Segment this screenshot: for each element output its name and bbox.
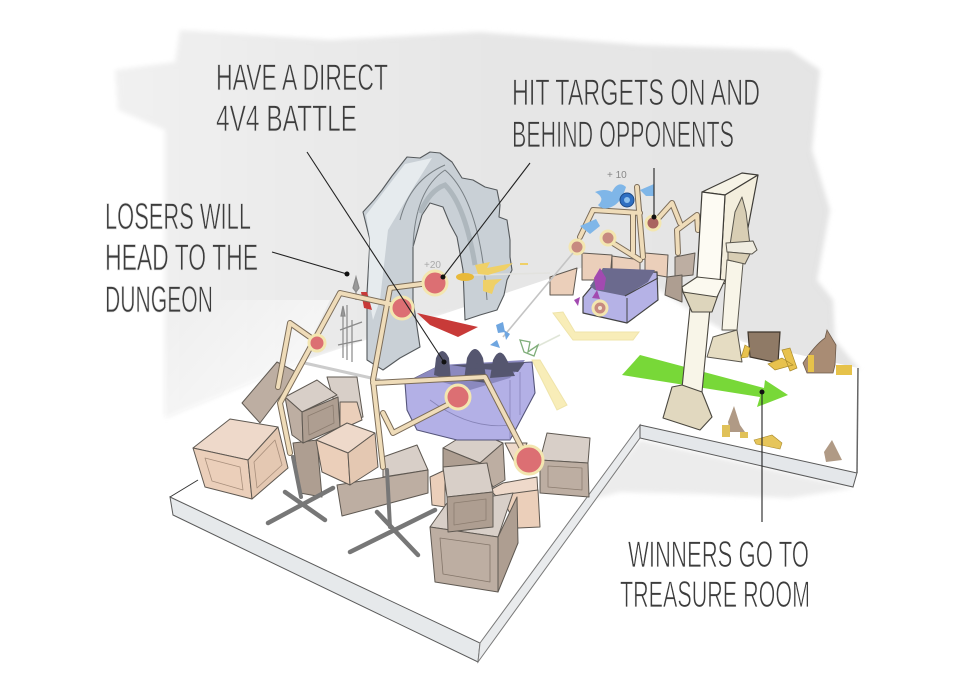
treasure chest xyxy=(748,332,780,363)
blue water splash and target xyxy=(580,184,654,234)
front column xyxy=(663,277,725,430)
crate: lower xyxy=(293,440,322,497)
callout: hit targets on and behind opponents: BEHIND OPPONENTS xyxy=(512,114,734,155)
gold coins xyxy=(808,355,852,375)
ruined stone arch xyxy=(363,152,512,370)
crate: long low xyxy=(337,445,428,516)
callout: winners go to treasure room: WINNERS GO TO xyxy=(628,534,809,575)
callout: have a direct 4v4 battle: 4V4 BATTLE xyxy=(216,98,357,139)
crate: peach centre xyxy=(316,423,378,485)
treasure pile xyxy=(741,330,852,375)
gold bars xyxy=(741,345,797,371)
callout: losers will head to the dungeon: HEAD TO THE xyxy=(105,237,258,278)
crate: large peach left xyxy=(193,419,288,499)
callout: losers will head to the dungeon: DUNGEON xyxy=(105,279,213,320)
fence xyxy=(300,277,380,380)
light shot trails xyxy=(473,253,573,350)
callout: losers will head to the dungeon: LOSERS WILL xyxy=(105,196,251,237)
score label +10: + 10 xyxy=(607,170,627,181)
red banner xyxy=(361,292,478,337)
background: grey paint wash xyxy=(115,30,860,500)
player silhouettes xyxy=(434,349,525,383)
small loot on floor xyxy=(722,406,842,462)
crate: far right xyxy=(540,433,590,497)
back targets xyxy=(570,216,660,254)
wall slab xyxy=(697,173,758,285)
back wooden arms xyxy=(580,187,698,260)
near crates xyxy=(193,362,590,592)
opponents' purple boat xyxy=(583,268,658,323)
callout: winners go to treasure room: TREASURE ROOM xyxy=(620,574,810,615)
callout: have a direct 4v4 battle xyxy=(216,57,446,364)
callout: hit targets on and behind opponents xyxy=(440,72,760,280)
callout: have a direct 4v4 battle: HAVE A DIRECT xyxy=(216,57,388,98)
wooden arms xyxy=(278,282,528,467)
red targets xyxy=(309,271,543,474)
yellow splash xyxy=(456,262,528,294)
back column xyxy=(707,197,757,362)
treasure sack xyxy=(803,330,836,373)
crate: tilted back xyxy=(242,362,298,423)
crate: big front xyxy=(430,493,518,592)
crate: upper grey xyxy=(285,380,340,443)
score label +20: +20 xyxy=(424,260,441,271)
crate: right stack xyxy=(430,430,540,528)
target stands xyxy=(268,457,435,555)
green direction arrow xyxy=(622,355,788,407)
colourful splashes near boat xyxy=(490,297,580,356)
callout: winners go to treasure room xyxy=(620,390,810,615)
callout: losers will head to the dungeon xyxy=(105,196,350,320)
pale yellow floor paths xyxy=(532,312,639,410)
crate: stacked top xyxy=(443,463,493,532)
back crates xyxy=(550,253,695,302)
players' purple boat xyxy=(405,349,535,440)
crate: stacked rear xyxy=(327,377,363,430)
platform xyxy=(170,265,858,662)
callout: hit targets on and behind opponents: HIT TARGETS ON AND xyxy=(512,72,760,113)
